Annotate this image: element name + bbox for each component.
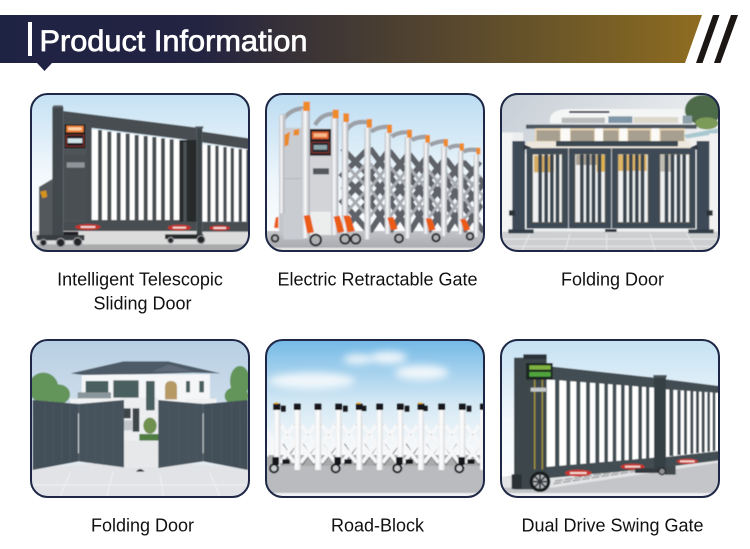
caption: folding door 2: Folding Door [91, 516, 194, 536]
top rail [556, 141, 678, 146]
panel: intelligent telescopic sliding door [31, 94, 249, 251]
panel: dual drive swing gate [501, 340, 719, 497]
arches [282, 108, 477, 152]
LED display [526, 363, 553, 380]
roof [71, 361, 221, 375]
right gate leaves [158, 400, 203, 468]
caption: folding door: Folding Door [561, 270, 664, 290]
panel: electric retractable gate [266, 94, 484, 251]
tree [685, 95, 722, 129]
main wheel [512, 474, 522, 489]
drive unit [634, 468, 660, 474]
left gate leaves [33, 400, 79, 470]
scissor lattice [266, 424, 480, 463]
panel frame [501, 340, 719, 497]
header banner [0, 15, 702, 71]
villa [550, 109, 683, 123]
scissor lattice [342, 148, 484, 232]
motor housing [39, 179, 54, 235]
caption: dual drive swing gate: Dual Drive Swing Gate [521, 516, 704, 536]
display panel [310, 129, 331, 156]
silver posts [279, 109, 479, 239]
caption: road-block: Road-Block [331, 516, 425, 536]
orange feet [274, 215, 470, 233]
panel frame [266, 94, 484, 251]
windows [86, 380, 204, 410]
intermediate post [654, 376, 666, 469]
main column [514, 358, 547, 489]
ground [266, 455, 484, 466]
trees [28, 366, 250, 405]
black post caps [273, 404, 484, 412]
display panel [65, 124, 85, 148]
wheels [272, 233, 473, 245]
panel: road-block [266, 340, 484, 497]
panel frame [266, 340, 484, 497]
wheels [272, 457, 475, 465]
decorative slashes [696, 15, 738, 63]
panel frame [31, 94, 249, 251]
scissor shadows [282, 444, 480, 464]
caption: intelligent telescopic sliding door: Sliding Door [93, 294, 192, 314]
header accent bar [28, 22, 32, 56]
interior glow behind gate [534, 156, 554, 172]
panel frame [501, 94, 719, 251]
header pointer [37, 63, 52, 71]
house walls [82, 374, 210, 403]
orange caps [303, 102, 480, 154]
title: Product Information [40, 25, 308, 58]
caption: electric retractable gate: Electric Retractable Gate [277, 270, 478, 290]
cabinet [279, 113, 286, 238]
panel frame [31, 340, 249, 497]
panel: folding door with white house [28, 340, 250, 497]
fence bars [545, 366, 719, 478]
caption: intelligent telescopic sliding door: Intelligent Telescopic [57, 270, 223, 290]
paving [32, 464, 248, 496]
gate pillars [512, 141, 525, 230]
gate leaves [530, 151, 692, 225]
panel: folding door with modern villa [501, 94, 722, 251]
white posts [274, 409, 484, 470]
